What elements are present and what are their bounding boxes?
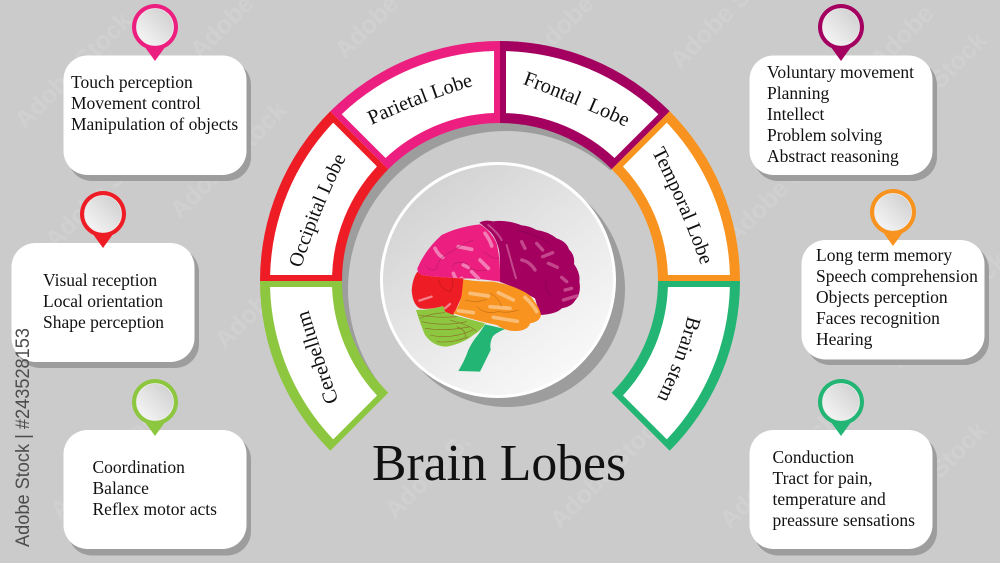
- watermark: Adobe Stock: [544, 406, 672, 534]
- pin: occipital: [80, 191, 126, 248]
- list: occipital: Visual reception: [43, 270, 157, 290]
- cerebellum region: [416, 306, 485, 347]
- panel: temporal functions: [802, 189, 989, 365]
- segment: frontal lobe: [500, 41, 670, 169]
- pin: temporal: [870, 189, 916, 246]
- panel: cerebellum functions: [64, 379, 251, 556]
- watermark: Adobe Stock: [864, 26, 992, 154]
- panel: brain stem functions: temperature and: [772, 489, 886, 509]
- parietal highlights: [435, 233, 492, 280]
- label: brain stem: Brain stem: [657, 316, 701, 400]
- list: temporal: Long term memory: [816, 245, 952, 265]
- watermark: Adobe Stock: [44, 396, 172, 524]
- watermark: Adobe Stock: [9, 6, 137, 134]
- label: frontal lobe: Frontal Lobe: [523, 71, 628, 126]
- stock credit: Adobe Stock | #243528153: [13, 328, 34, 547]
- panel: frontal functions: [750, 4, 937, 181]
- occipital highlights: [419, 297, 450, 308]
- segment: temporal lobe: [579, 111, 790, 322]
- label: cerebellum: Cerebellum: [300, 310, 337, 403]
- segment: cerebellum: [210, 240, 421, 451]
- watermark: Adobe Stock: [864, 416, 992, 544]
- panel: brain stem functions: Tract for pain,: [772, 468, 872, 488]
- pin: parietal: [132, 4, 178, 61]
- pin: frontal: [818, 4, 864, 61]
- segment: parietal lobe: [330, 0, 541, 202]
- watermark: Adobe Stock: [544, 226, 672, 354]
- pin: cerebellum: [132, 379, 178, 436]
- label: parietal lobe: Parietal Lobe: [366, 77, 472, 125]
- label: temporal lobe: Temporal Lobe: [653, 146, 709, 264]
- panel: cerebellum functions: Reflex motor acts: [92, 499, 217, 519]
- panel: frontal functions: Problem solving: [767, 125, 882, 145]
- center disc: [382, 164, 625, 407]
- list: cerebellum: Coordination: [92, 457, 185, 477]
- panel: frontal functions: Planning: [767, 83, 829, 103]
- icon: brain: [412, 221, 580, 372]
- temporal lobe region: [453, 279, 541, 331]
- panel: parietal functions: [64, 4, 251, 181]
- panel: brain stem functions: [750, 379, 937, 556]
- temporal/occipital red region: [412, 272, 463, 315]
- panel: cerebellum functions: Balance: [92, 478, 149, 498]
- panel: brain stem functions: preassure sensations: [772, 510, 915, 530]
- panel: occipital functions: Local orientation: [43, 291, 163, 311]
- watermark: Adobe Stock: [379, 396, 507, 524]
- panel: occipital functions: [12, 191, 199, 368]
- parietal lobe region: [417, 224, 500, 282]
- panel: temporal functions: Objects perception: [816, 287, 948, 307]
- temporal highlights: [458, 293, 537, 321]
- watermark: Adobe Stock: [209, 226, 337, 354]
- watermark: Adobe Stock: [39, 126, 167, 254]
- panel: temporal functions: Faces recognition: [816, 308, 940, 328]
- watermark: Adobe Stock: [719, 121, 847, 249]
- cerebellum folds: [418, 313, 477, 342]
- watermark: Adobe Stock: [714, 406, 842, 534]
- panel: frontal functions: Intellect: [767, 104, 824, 124]
- temporal sulci: [465, 293, 518, 313]
- list: brain stem: Conduction: [772, 447, 854, 467]
- panel: parietal functions: Manipulation of objects: [71, 114, 238, 134]
- arc shadow crescent: [342, 123, 664, 447]
- parietal sulci: [425, 240, 498, 271]
- watermark: Adobe Stock: [384, 176, 512, 304]
- list: parietal: Touch perception: [71, 72, 193, 92]
- label: occipital lobe: Occipital Lobe: [290, 155, 346, 266]
- watermark: Adobe: [864, 0, 939, 74]
- title: Brain Lobes: [372, 435, 626, 492]
- pin: brain stem: [818, 379, 864, 436]
- panel: occipital functions: Shape perception: [43, 312, 164, 332]
- frontal highlights: [488, 225, 516, 278]
- brain stem region: [458, 324, 505, 372]
- segment: occipital lobe: [260, 111, 388, 281]
- frontal lobe region: [479, 221, 580, 315]
- panel: parietal functions: Movement control: [71, 93, 201, 113]
- list: frontal: Voluntary movement: [767, 62, 914, 82]
- panel: temporal functions: Speech comprehension: [816, 266, 978, 286]
- segment: brain stem: [612, 281, 740, 451]
- watermark: Adobe Stock: [164, 96, 292, 224]
- panel: frontal functions: Abstract reasoning: [767, 146, 899, 166]
- panel: temporal functions: Hearing: [816, 329, 873, 349]
